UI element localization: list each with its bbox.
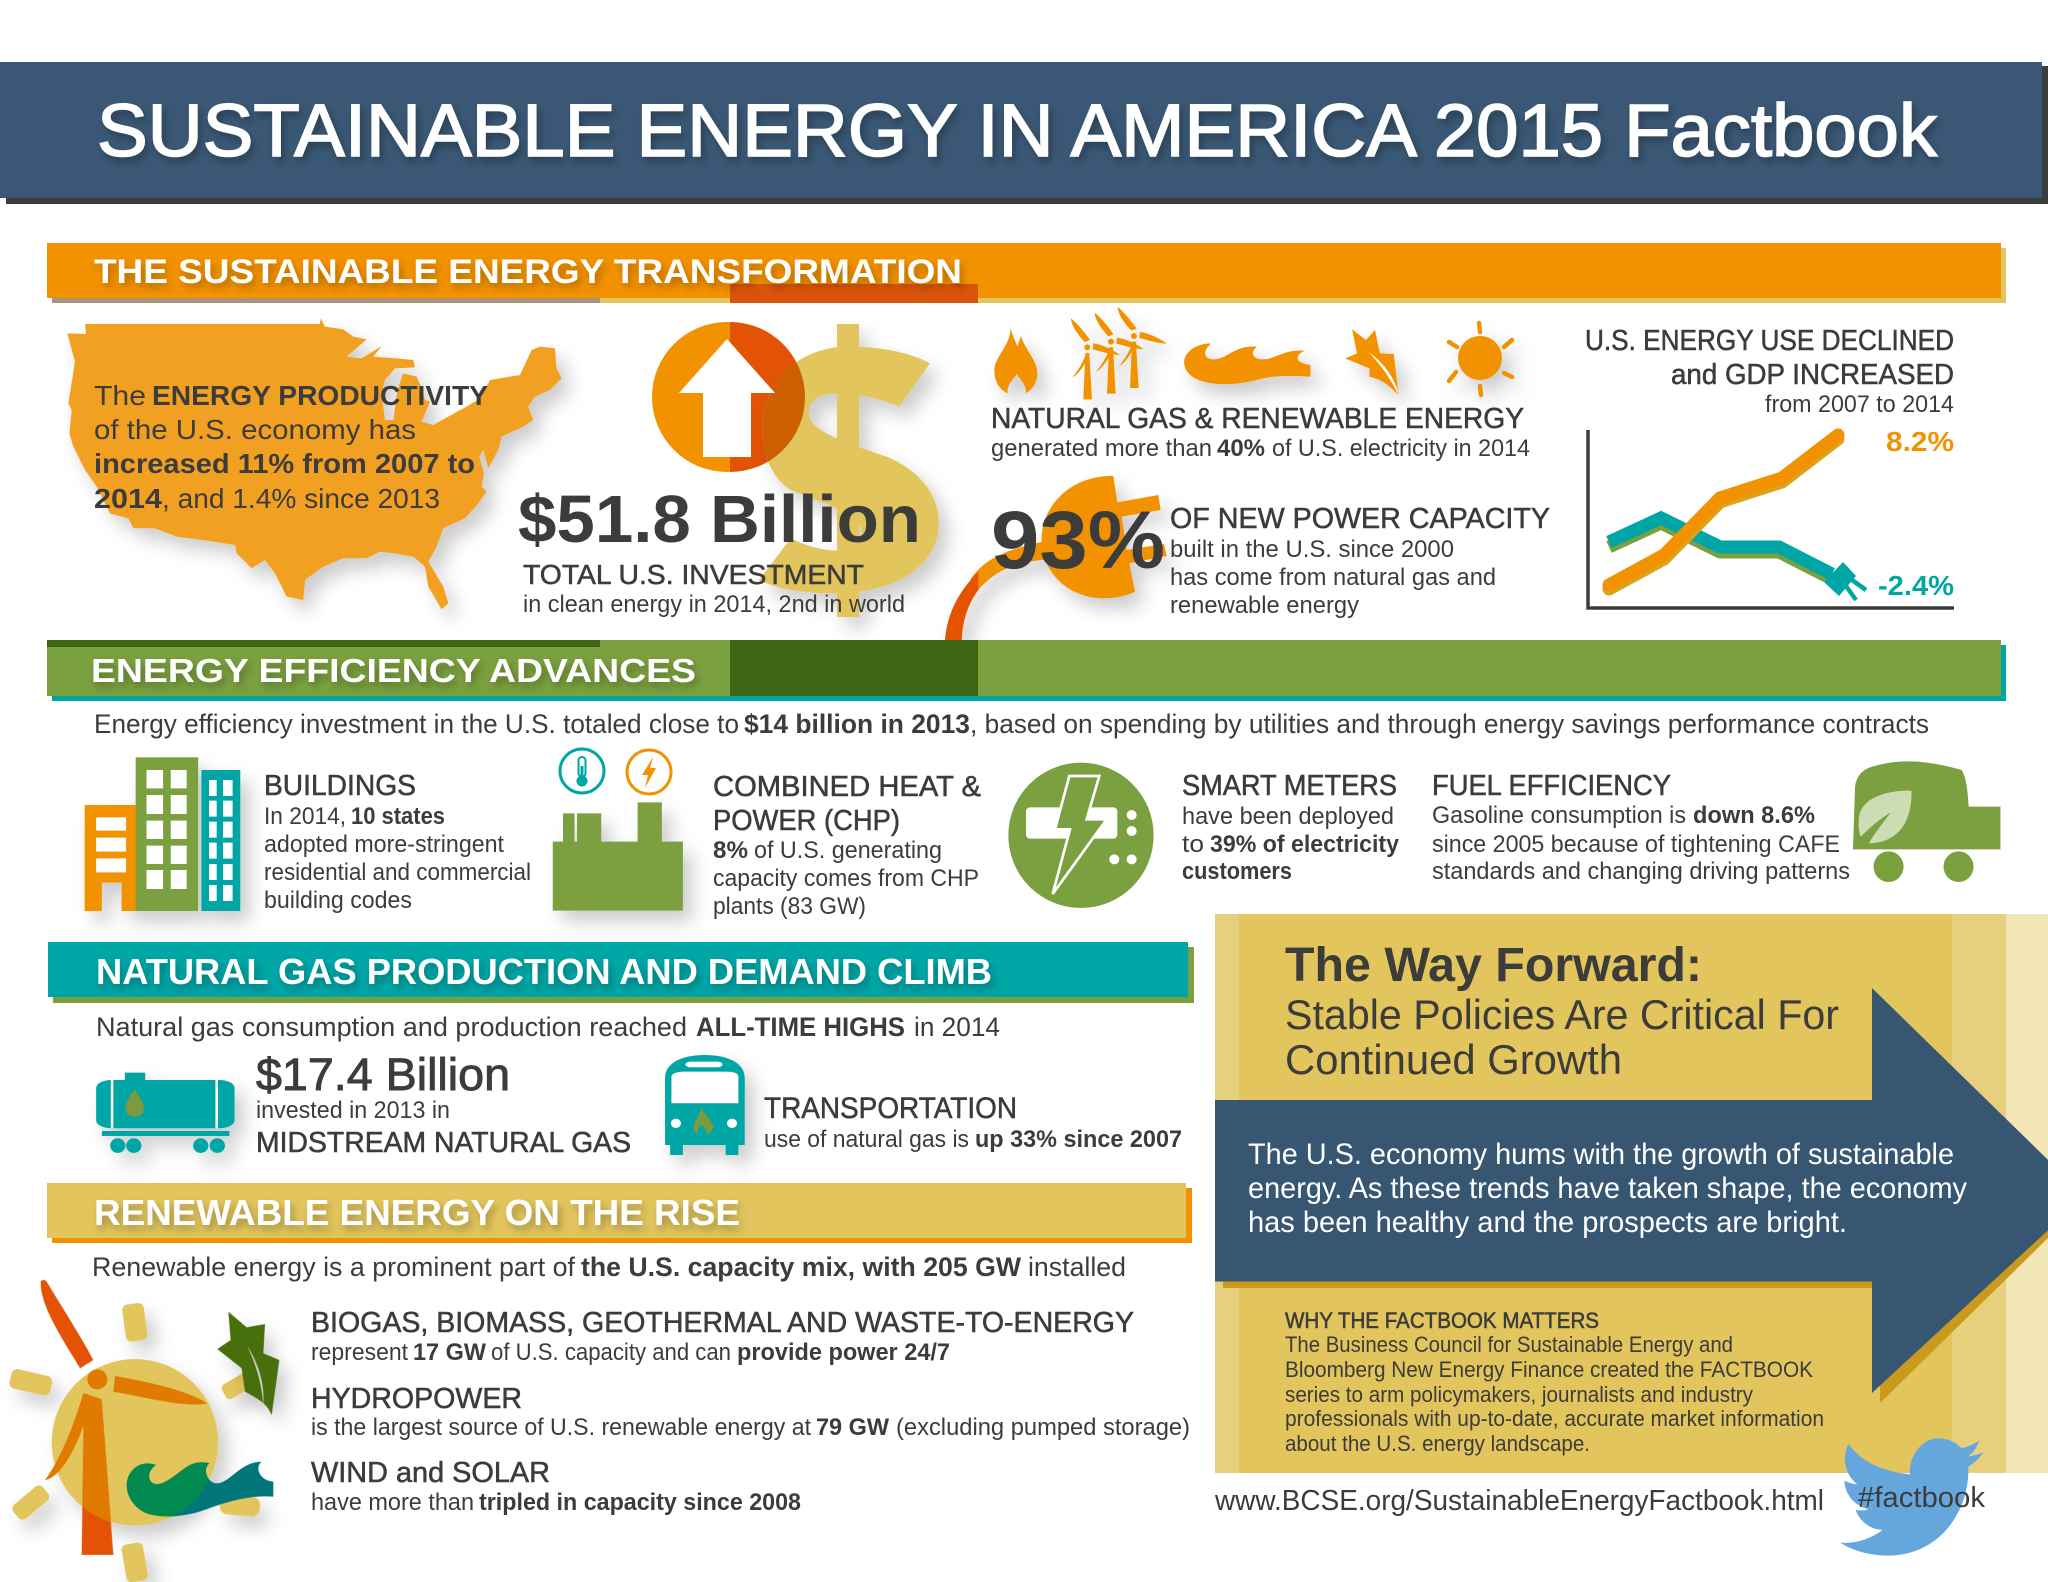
- way forward heading: The Way Forward:: [1285, 939, 1702, 992]
- renewable intro text: installed: [1028, 1252, 1126, 1282]
- natural gas intro text: ALL-TIME HIGHS: [696, 1012, 905, 1042]
- icon: wave: [1184, 343, 1310, 384]
- energy source icons: [994, 307, 1512, 399]
- efficiency intro text: Energy efficiency investment in the U.S. totaled close to: [94, 709, 739, 739]
- section bar: energy efficiency advances: [47, 640, 2006, 701]
- fuel efficiency text: since 2005 because of tightening CAFE: [1432, 831, 1840, 858]
- wind and solar text: tripled in capacity since 2008: [479, 1489, 801, 1516]
- map text: 2014: [94, 483, 162, 514]
- icon: thermometer in teal ring: [560, 749, 604, 793]
- smart meters text: SMART METERS: [1182, 770, 1397, 802]
- combined heat and power text: of U.S. generating: [754, 837, 942, 864]
- icon: wind turbines: [1071, 307, 1167, 399]
- natural gas and renewable text: [991, 403, 1530, 462]
- map text: of the U.S. economy has: [94, 414, 416, 445]
- efficiency intro text: $14 billion in 2013: [744, 709, 970, 739]
- combined heat and power text: 8%: [713, 837, 748, 864]
- section bar: natural gas: [48, 942, 1194, 1003]
- chart value labels: 8.2%: [1886, 426, 1954, 457]
- map text: increased 11% from 2007 to: [94, 448, 475, 479]
- icon: sun: [1449, 323, 1512, 395]
- icon: factory: [553, 802, 683, 911]
- 93 percent capacity: OF NEW POWER CAPACITY: [1170, 503, 1550, 535]
- wind and solar text: have more than: [311, 1489, 474, 1516]
- way forward heading: Stable Policies Are Critical For: [1285, 991, 1839, 1038]
- fuel efficiency text: Gasoline consumption is: [1432, 802, 1686, 829]
- natural gas and renewable text: of U.S. electricity in 2014: [1272, 435, 1530, 462]
- icon: buildings: [85, 757, 240, 911]
- biogas text: 17 GW: [413, 1339, 486, 1366]
- way forward heading: Continued Growth: [1285, 1036, 1622, 1083]
- buildings text: BUILDINGS: [264, 770, 416, 802]
- fuel efficiency text: [1432, 770, 1850, 885]
- smart meters text: have been deployed: [1182, 803, 1394, 830]
- buildings text: building codes: [264, 887, 412, 914]
- fuel efficiency text: down 8.6%: [1693, 802, 1815, 829]
- icon: leaf: [1345, 329, 1399, 395]
- 93 percent capacity: has come from natural gas and: [1170, 564, 1496, 591]
- natural gas intro text: in 2014: [914, 1012, 1000, 1042]
- US map with energy productivity: [67, 318, 562, 609]
- factbook hashtag: #factbook: [1858, 1482, 1985, 1514]
- hydropower text: 79 GW: [816, 1414, 889, 1441]
- investment text: $51.8 Billion: [518, 482, 921, 557]
- renewable intro text: Renewable energy is a prominent part of: [92, 1252, 575, 1282]
- section bar: the sustainable energy transformation: [47, 243, 2006, 303]
- combined heat and power text: plants (83 GW): [713, 893, 866, 920]
- energy use vs GDP heading: [1585, 325, 1954, 418]
- natural gas and renewable text: generated more than: [991, 435, 1212, 462]
- why the factbook matters: [1285, 1308, 1824, 1456]
- header banner: [0, 62, 2048, 204]
- section bar: energy efficiency advances: ENERGY EFFICIENCY ADVANCES: [91, 652, 696, 689]
- investment graphic: arrow circle and dollar sign: [652, 322, 939, 617]
- section bar: renewable energy: [47, 1183, 1192, 1243]
- sun rays: [8, 1302, 261, 1582]
- natural gas and renewable text: NATURAL GAS & RENEWABLE ENERGY: [991, 403, 1524, 435]
- why the factbook matters: Bloomberg New Energy Finance created the FACTBOOK: [1285, 1357, 1813, 1382]
- line chart: energy use and GDP: [1588, 426, 1954, 608]
- buildings text: residential and commercial: [264, 859, 531, 886]
- way forward heading: [1285, 939, 1839, 1083]
- GDP line: [1609, 435, 1838, 589]
- buildings text: In 2014,: [264, 803, 346, 830]
- map text: [94, 380, 488, 514]
- leaf: [217, 1312, 279, 1415]
- map shape: [67, 318, 562, 609]
- hydropower text: is the largest source of U.S. renewable energy at: [311, 1414, 811, 1441]
- map text: ENERGY PRODUCTIVITY: [152, 380, 488, 411]
- biogas text: [311, 1307, 1134, 1366]
- efficiency intro text: [94, 709, 1929, 739]
- wave: [127, 1462, 273, 1516]
- energy use vs GDP heading: from 2007 to 2014: [1765, 391, 1954, 418]
- why the factbook matters: professionals with up-to-date, accurate market information: [1285, 1406, 1824, 1431]
- smart meters text: customers: [1182, 858, 1292, 885]
- transportation text: [764, 1092, 1182, 1153]
- natural gas and renewable text: 40%: [1217, 435, 1265, 462]
- why the factbook matters: The Business Council for Sustainable Energy and: [1285, 1332, 1733, 1357]
- chart value labels: -2.4%: [1878, 570, 1954, 601]
- biogas text: of U.S. capacity and can: [491, 1339, 731, 1366]
- title: SUSTAINABLE ENERGY IN AMERICA 2015 Factbook: [97, 89, 1938, 172]
- arrow body text: [1248, 1138, 1967, 1239]
- icon: smart meter: [1008, 763, 1154, 908]
- hydropower text: [311, 1383, 1190, 1441]
- icon: lightning bolt in orange ring: [627, 750, 671, 794]
- hydropower text: (excluding pumped storage): [896, 1414, 1190, 1441]
- 93 percent capacity: 93%: [991, 495, 1165, 586]
- 93 percent capacity: renewable energy: [1170, 592, 1359, 619]
- arrow body text: has been healthy and the prospects are bright.: [1248, 1206, 1847, 1239]
- combined heat and power text: [713, 771, 981, 920]
- why the factbook matters: about the U.S. energy landscape.: [1285, 1431, 1590, 1456]
- arrow body text: The U.S. economy hums with the growth of sustainable: [1248, 1138, 1954, 1171]
- icon: power plug and cord: [945, 476, 1167, 640]
- wind and solar text: [311, 1457, 801, 1516]
- map text: , and 1.4% since 2013: [162, 483, 440, 514]
- combined heat and power text: COMBINED HEAT &: [713, 771, 981, 803]
- section bar: the sustainable energy transformation: THE SUSTAINABLE ENERGY TRANSFORMATION: [94, 253, 962, 291]
- fuel efficiency text: FUEL EFFICIENCY: [1432, 770, 1671, 802]
- section bar: natural gas: NATURAL GAS PRODUCTION AND DEMAND CLIMB: [96, 951, 992, 992]
- combined heat and power text: POWER (CHP): [713, 805, 900, 837]
- icon: tank car: [96, 1073, 235, 1153]
- renewable intro text: the U.S. capacity mix, with 205 GW: [581, 1252, 1022, 1282]
- investment text: [518, 482, 921, 618]
- 93 percent capacity: [991, 495, 1550, 619]
- panel: the way forward: [1215, 914, 2048, 1473]
- midstream investment text: MIDSTREAM NATURAL GAS: [256, 1127, 631, 1159]
- investment text: in clean energy in 2014, 2nd in world: [523, 591, 905, 618]
- transportation text: TRANSPORTATION: [764, 1092, 1017, 1125]
- energy use vs GDP heading: and GDP INCREASED: [1671, 359, 1954, 391]
- combined heat and power text: capacity comes from CHP: [713, 865, 979, 892]
- midstream investment text: $17.4 Billion: [256, 1049, 510, 1100]
- midstream investment text: invested in 2013 in: [256, 1097, 450, 1124]
- transportation text: up 33% since 2007: [975, 1126, 1182, 1153]
- icon: flame: [994, 328, 1037, 393]
- biogas text: represent: [311, 1339, 408, 1366]
- wind and solar text: WIND and SOLAR: [311, 1457, 550, 1489]
- buildings text: [264, 770, 531, 914]
- fuel efficiency text: standards and changing driving patterns: [1432, 858, 1850, 885]
- website url: www.BCSE.org/SustainableEnergyFactbook.html: [1214, 1485, 1824, 1517]
- 93 percent capacity: built in the U.S. since 2000: [1170, 536, 1454, 563]
- arrow body text: energy. As these trends have taken shape, the economy: [1248, 1172, 1967, 1205]
- icon: twitter bird: [1840, 1438, 1983, 1556]
- icon: truck with leaf: [1853, 761, 2000, 882]
- arrow: [1215, 988, 2048, 1403]
- smart meters text: [1182, 770, 1400, 885]
- natural gas intro text: Natural gas consumption and production reached: [96, 1012, 687, 1042]
- biogas text: BIOGAS, BIOMASS, GEOTHERMAL AND WASTE-TO-ENERGY: [311, 1307, 1134, 1339]
- efficiency intro text: , based on spending by utilities and through energy savings performance contracts: [970, 709, 1929, 739]
- renewable intro text: [92, 1252, 1126, 1282]
- chart value labels: [1878, 426, 1954, 601]
- wind turbine: [41, 1280, 207, 1555]
- buildings text: 10 states: [351, 803, 445, 830]
- hydropower text: HYDROPOWER: [311, 1383, 522, 1415]
- investment text: TOTAL U.S. INVESTMENT: [523, 559, 864, 590]
- energy use line with plug: [1609, 518, 1866, 600]
- energy use vs GDP heading: U.S. ENERGY USE DECLINED: [1585, 325, 1954, 357]
- buildings text: adopted more-stringent: [264, 831, 504, 858]
- biogas text: provide power 24/7: [737, 1339, 950, 1366]
- map text: The: [94, 380, 146, 411]
- transportation text: use of natural gas is: [764, 1126, 969, 1153]
- section bar: renewable energy: RENEWABLE ENERGY ON THE RISE: [94, 1192, 740, 1233]
- smart meters text: 39% of electricity: [1210, 831, 1400, 858]
- why the factbook matters: series to arm policymakers, journalists and industry: [1285, 1382, 1753, 1407]
- natural gas intro text: [96, 1012, 1000, 1042]
- icon: renewable energy cluster: [8, 1280, 279, 1582]
- smart meters text: to: [1182, 831, 1204, 858]
- icon: bus: [665, 1055, 745, 1155]
- midstream investment text: [256, 1049, 631, 1159]
- why the factbook matters: WHY THE FACTBOOK MATTERS: [1285, 1308, 1599, 1333]
